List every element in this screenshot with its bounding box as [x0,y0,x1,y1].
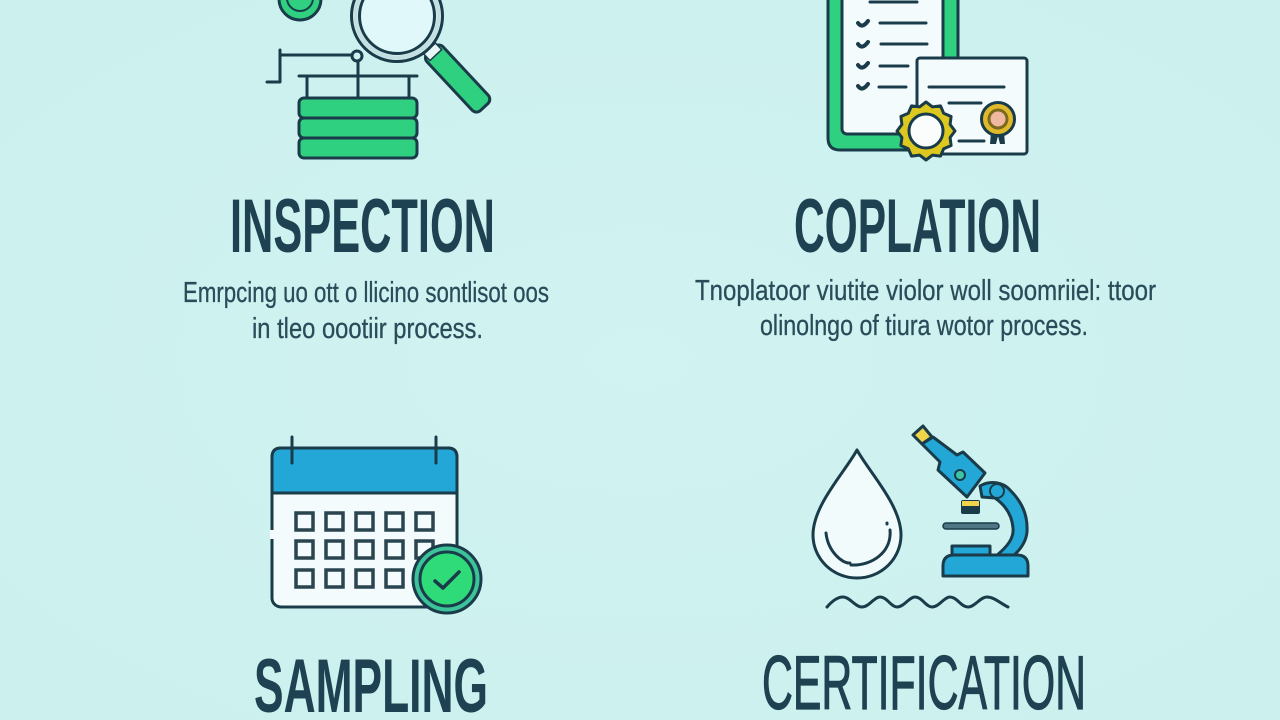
text block: coplation description: Tnoplatoor viutite violor woll soomriiel: ttoor [695,275,1156,307]
icon: clipboard and certificate [828,0,1027,160]
panel: inspection [183,0,549,345]
icon: inspection magnifier and tank [267,0,492,158]
icon: water drop and microscope [813,426,1028,607]
heading: coplation: COPLATION [794,184,1041,269]
text block: inspection description: Emrpcing uo ott o llicino sontlisot oos [183,277,549,309]
panel: sampling [254,437,488,720]
panel: certification [762,426,1086,720]
text block: inspection description [183,277,549,345]
text block: inspection description: in tleo oootiir process. [252,313,483,345]
text block: coplation description [695,275,1156,342]
panel: coplation [695,0,1156,342]
heading: inspection: INSPECTION [230,184,495,269]
text block: coplation description: olinolngo of tiura wotor process. [760,310,1088,342]
icon: calendar with check badge [270,437,481,613]
